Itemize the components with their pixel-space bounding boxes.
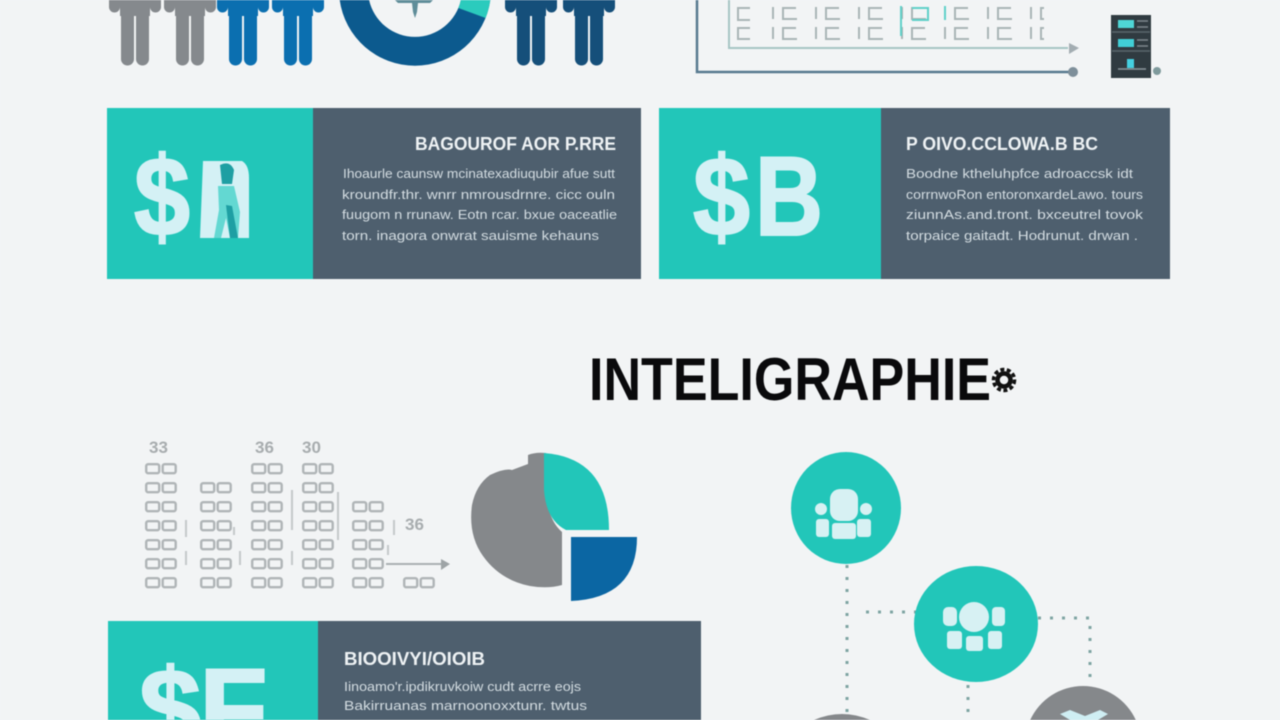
person: blue 2 [272,0,324,66]
column labels: 30 [302,438,321,457]
person: blue 1 [217,0,269,66]
panel: card A [107,108,641,279]
icon: gear [994,370,1014,390]
icon: dollar B: $ [693,134,750,259]
icon: dollar and figure [134,134,249,259]
body text: kroundfr.thr. wnrr nmrousdrnre. cicc ouln [342,187,615,202]
person: navy 2 [563,0,615,66]
heading: BAGOUROF AOR P.RRE [415,134,616,154]
icon: dollar and figure: $ [134,134,190,259]
body text: Bakirruanas marnoonoxxtunr. twtus [344,698,588,713]
body text [906,166,1144,243]
node: teal top [791,452,901,564]
person: navy 1 [505,0,557,66]
top-right axis chart [697,0,1079,77]
body text [342,166,617,243]
column labels: 36 [255,438,274,457]
body text: Boodne ktheluhpfce adroaccsk idt [906,166,1133,181]
person: grey 2 [164,0,216,66]
column labels: 36 [405,515,424,534]
body text: torpaice gaitadt. Hodrunut. drwan . [906,228,1138,243]
body text: corrnwoRon entoronxardeLawo. tours [906,187,1144,202]
people row [109,0,615,66]
icon: server rack [1111,15,1161,78]
body text: fuugom n rrunaw. Eotn rcar. bxue oaceatlie [342,207,617,222]
body text: ziunnAs.and.tront. bxceutrel tovok [906,207,1144,222]
icon: dollar B [693,134,823,259]
dotted connectors [847,565,1090,720]
donut chart [340,0,490,66]
column labels [149,438,424,534]
icon: dollar B: B [755,134,823,259]
heading: P OIVO.CCLOWA.B BC [906,134,1098,154]
node: grey left [814,714,870,720]
body text: Iinoamo'r.ipdikruvkoiw cudt acrre eojs [344,679,582,694]
body text [344,679,588,713]
node: teal middle [914,566,1038,682]
heading: BIOOIVYI/OIOIB [344,649,485,669]
panel: card B [659,108,1170,279]
grid bar chart [145,438,450,590]
node: grey right [1030,686,1136,720]
network diagram [791,452,1136,720]
title: INTELIGRAPHIE [589,346,991,413]
body text: Ihoaurle caunsw mcinatexadiuqubir afue sutt [343,166,615,181]
person: grey 1 [109,0,161,66]
body text: torn. inagora onwrat sauisme kehauns [342,228,600,243]
pie chart [471,453,637,601]
panel: card C [108,621,701,720]
column labels: 33 [149,438,168,457]
